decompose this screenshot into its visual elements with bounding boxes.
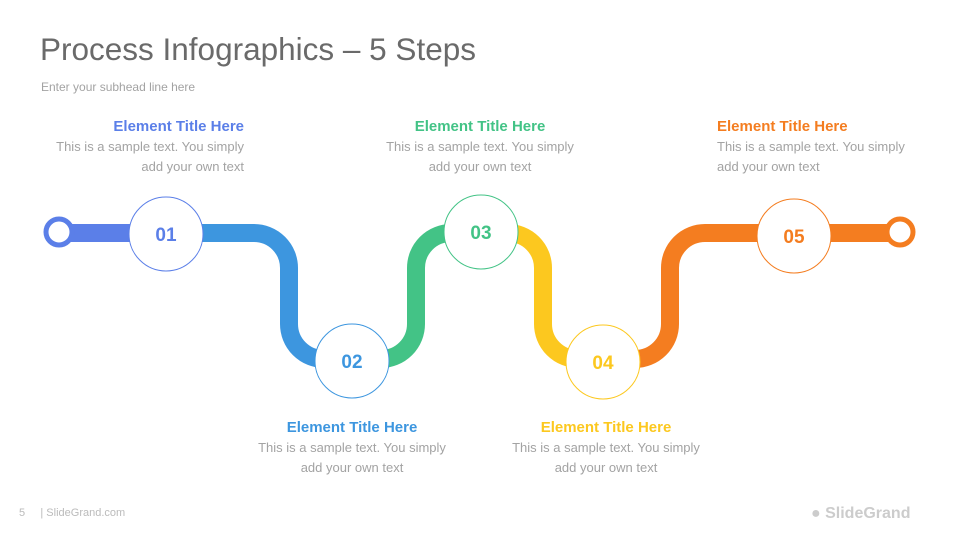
text block 1: This is a sample text. You simply [56,139,244,154]
text block 3: Element Title Here [415,118,545,135]
text block 2: Element Title Here [287,419,417,436]
orange segment [625,233,890,359]
step numbers [155,223,805,374]
text block 5 [717,118,905,174]
text block 2: add your own text [301,460,403,475]
step numbers: 02 [341,352,363,373]
step numbers: 03 [470,223,492,244]
step numbers: 04 [592,353,614,374]
text block 1: Element Title Here [113,118,244,135]
text block 3: add your own text [429,159,531,174]
text block 3 [386,118,574,174]
step numbers: 05 [783,227,805,248]
end node [887,219,913,245]
blue segment [200,233,330,359]
text block 5: This is a sample text. You simply [717,139,905,154]
text block 1 [56,118,244,174]
text block 2 [258,419,446,475]
text block 4: add your own text [555,460,657,475]
text block 4: This is a sample text. You simply [512,440,700,455]
text block 4: Element Title Here [541,419,671,436]
title: Process Infographics – 5 Steps [40,31,476,67]
text block 4 [512,419,700,475]
step numbers: 01 [155,225,177,246]
start segment [59,224,135,242]
text block 2: This is a sample text. You simply [258,440,446,455]
subhead: Enter your subhead line here [41,80,195,94]
footer: 5 | SlideGrand.com [19,507,125,519]
text block 3: This is a sample text. You simply [386,139,574,154]
start node [46,219,72,245]
yellow segment [500,233,585,359]
step circles [129,195,831,399]
text block 5: Element Title Here [717,118,848,135]
text block 1: add your own text [141,159,244,174]
logo: ● SlideGrand [811,505,910,522]
text block 5: add your own text [717,159,820,174]
green segment [375,233,460,359]
